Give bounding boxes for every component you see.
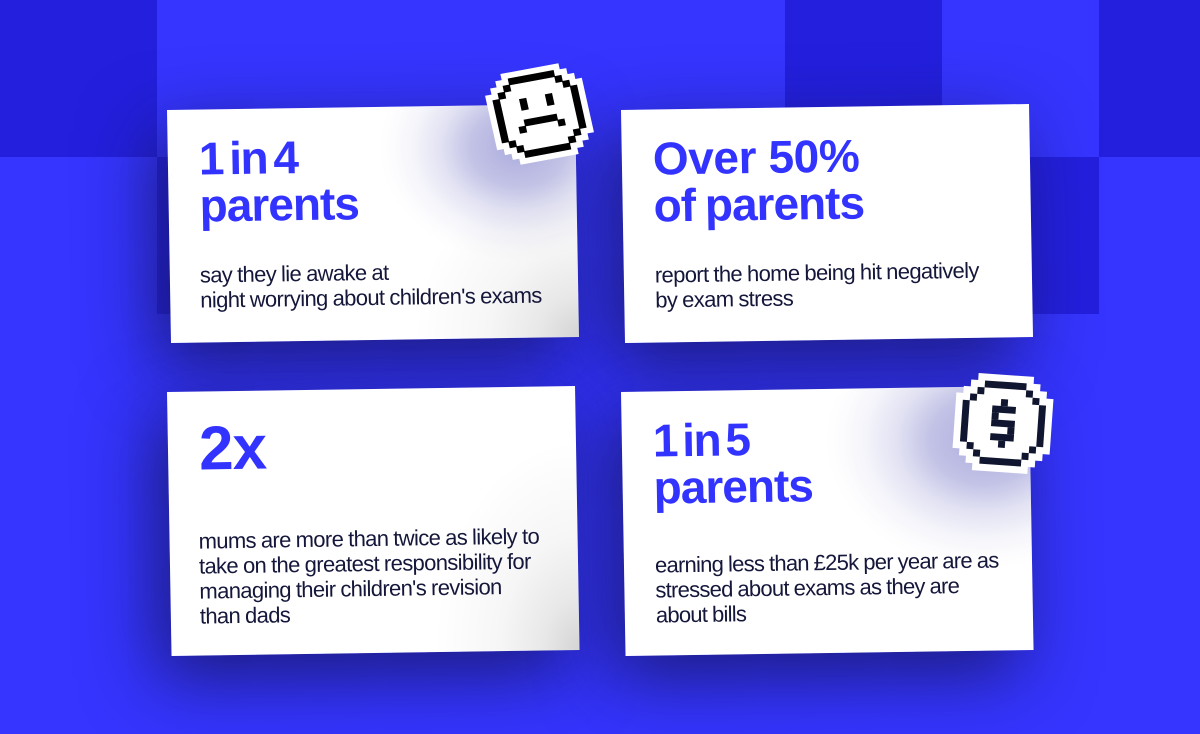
text: mums responsibility: managing their children's revision [199,574,502,604]
text: home hit negatively [655,258,980,313]
panel: over 50% of parents [621,104,1033,343]
heading: 1 in 5 parents: 1 in 5 [652,413,750,466]
heading: over 50% of parents [652,129,864,231]
heading: 1 in 5 parents [652,413,813,513]
text: earning less than 25k: earning less than £25k per year are as [655,547,999,578]
heading: 2x: 2x [198,414,267,484]
heading: 1 in 5 parents: parents [653,459,813,513]
text: earning less than 25k: stressed about exams as they are [655,573,959,603]
text: mums responsibility: take on the greatest responsibility for [199,549,531,579]
heading: over 50% of parents: of parents [653,176,864,231]
text: mums responsibility: than dads [200,602,290,629]
panel: 2x mums [167,386,580,656]
text: mums responsibility: mums are more than twice as likely to [198,524,539,554]
text: mums responsibility [198,524,539,629]
text: home hit negatively: report the home being hit negatively [655,258,979,288]
heading: 1 in 4 parents: parents [199,177,359,231]
text: earning less than 25k: about bills [656,601,746,628]
text: lie awake: night worrying about children's exams [200,283,542,313]
icon: pixel sad face [485,63,594,165]
heading: 1 in 4 parents [198,131,359,231]
panel: 1 in 4 parents [167,104,579,343]
text: earning less than 25k [655,547,999,628]
text: lie awake: say they lie awake at [200,260,389,288]
heading: 1 in 4 parents: 1 in 4 [198,131,298,184]
heading: over 50% of parents: Over 50% [652,129,860,184]
text: lie awake [200,260,542,313]
text: home hit negatively: by exam stress [655,286,793,313]
panel: 1 in 5 parents [621,386,1034,656]
icon: pixel dollar coin [952,373,1054,474]
